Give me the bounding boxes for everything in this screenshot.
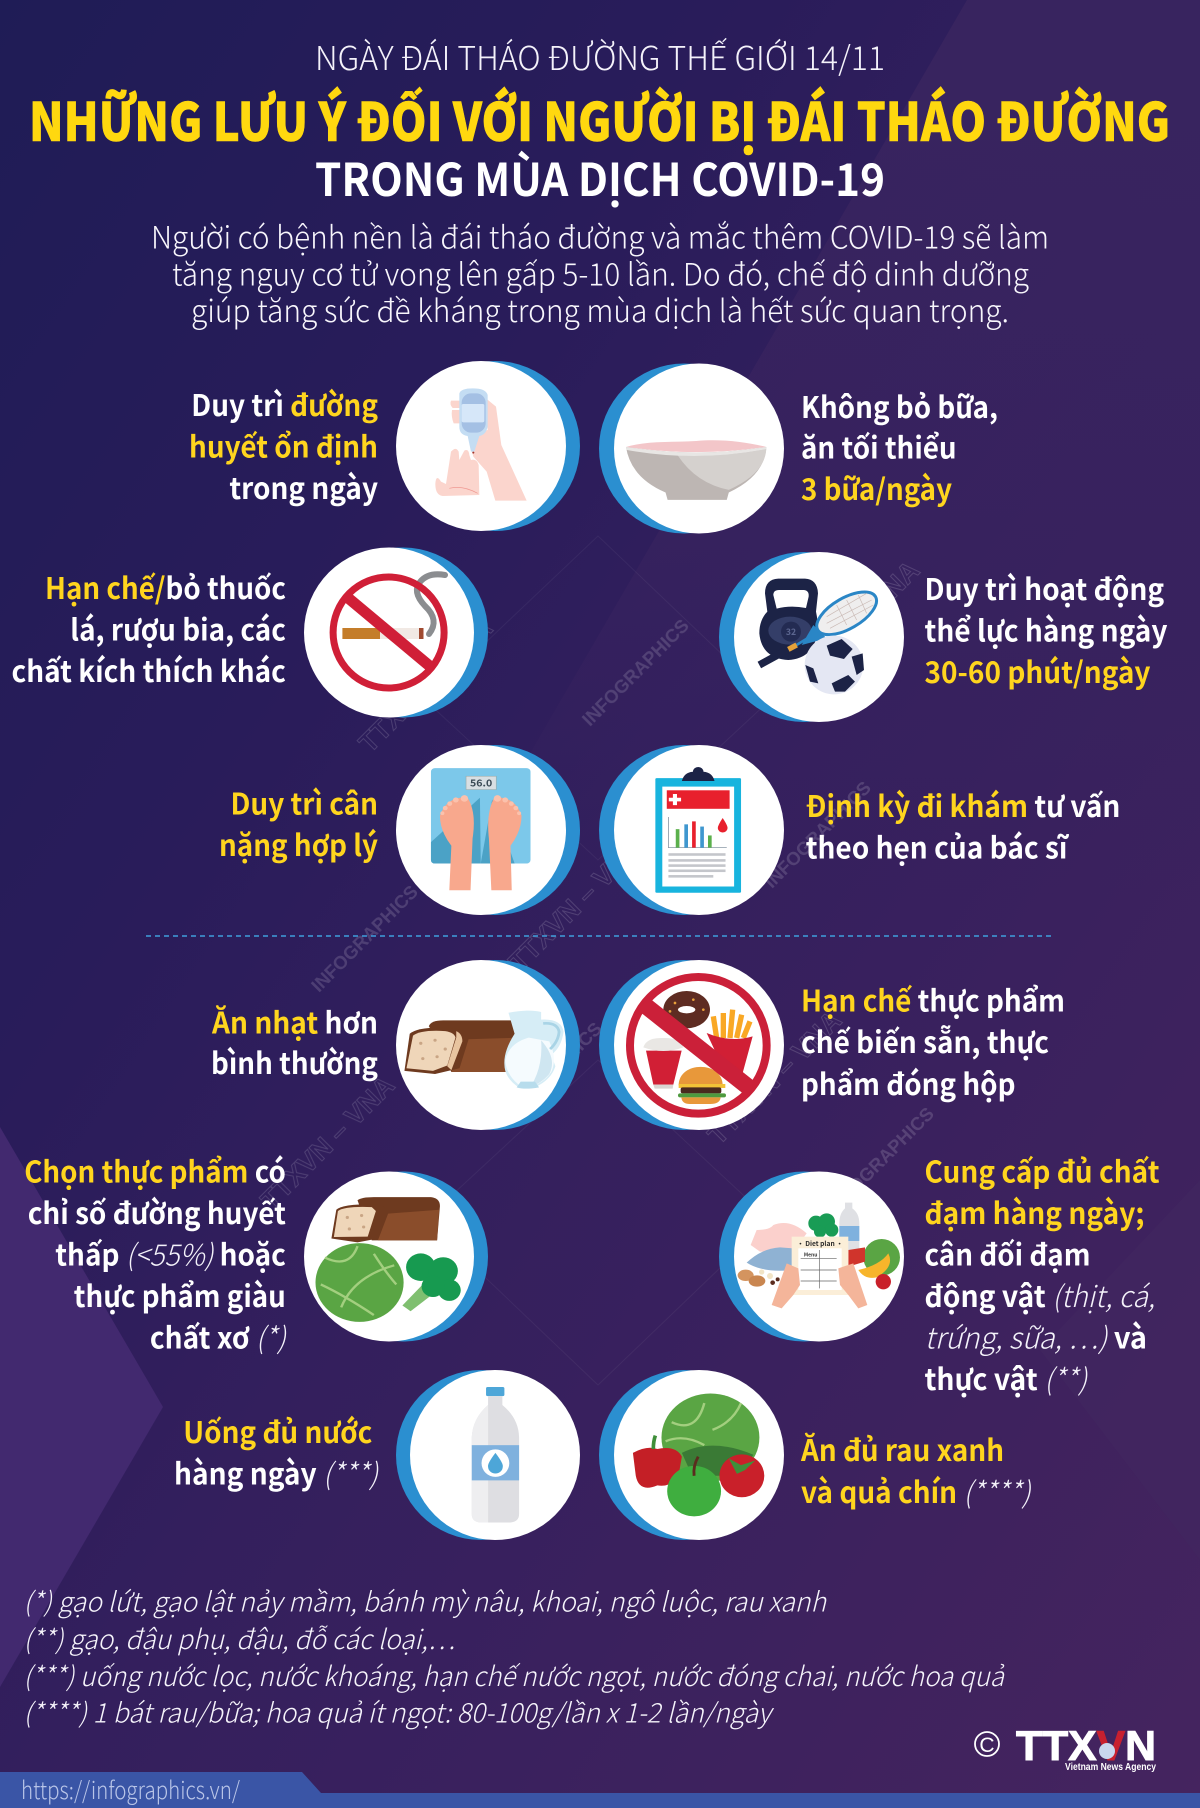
panel: keep blood sugar stable [189, 361, 580, 531]
footnotes: (***) uống nước lọc, nước khoáng, hạn chế nước ngọt, nước đóng chai, nước hoa quả [24, 1655, 1005, 1694]
text: low glycemic index food [24, 1149, 288, 1357]
text: daily physical activity: thể lực hàng ngày [924, 609, 1168, 651]
icon: feet on scale: 56.0 [470, 775, 492, 789]
text: limit processed food [801, 979, 1065, 1104]
watermarks: TTXVN – VNA [702, 1005, 847, 1150]
icon: no smoking [304, 548, 488, 718]
text: daily physical activity [924, 567, 1168, 692]
text: low glycemic index food: thực phẩm giàu [74, 1274, 286, 1316]
text: maintain healthy weight: Duy trì cân [230, 782, 378, 824]
watermarks: TTXVN – VNA [503, 832, 648, 977]
text: limit processed food: phẩm đóng hộp [801, 1062, 1016, 1104]
text: vegetables and fruit: và quả chín (****) [801, 1470, 1032, 1512]
text: enough protein: đạm hàng ngày; [924, 1191, 1144, 1233]
text: limit tobacco and alcohol: Hạn chế/bỏ thuốc [45, 566, 286, 608]
icon: kettlebell, racket and ball [719, 552, 904, 722]
text: enough protein: trứng, sữa, …) và [924, 1315, 1147, 1357]
panel: vegetables and fruit [599, 1370, 1032, 1540]
text: low glycemic index food: thấp (<55%) hoặc [55, 1232, 286, 1274]
panel: low glycemic index food [24, 1149, 488, 1357]
footnotes: (****) 1 bát rau/bữa; hoa quả ít ngọt: 80-100g/lần x 1-2 lần/ngày [24, 1692, 775, 1731]
icon: medical clipboard [599, 745, 784, 915]
text: enough protein: cân đối đạm [924, 1232, 1090, 1274]
text: limit processed food: chế biến sẵn, thực [801, 1020, 1049, 1062]
intro text [151, 212, 1049, 331]
divider [146, 935, 1053, 937]
watermarks: INFOGRAPHICS [578, 615, 693, 730]
text: eat less salt: Ăn nhạt hơn [211, 1001, 378, 1043]
text: drink enough water: hàng ngày (***) [174, 1451, 380, 1493]
icon: bread and milk jug [396, 960, 580, 1130]
text: do not skip meals: Không bỏ bữa, [801, 385, 998, 427]
watermarks [255, 555, 938, 1218]
panel: enough protein [719, 1149, 1160, 1399]
icon: bowl [599, 364, 784, 534]
panel: daily physical activity [719, 552, 1168, 722]
watermarks: TTXVN – VNA [353, 613, 498, 758]
text: maintain healthy weight: nặng hợp lý [219, 823, 378, 865]
text: regular checkups [806, 784, 1120, 867]
icon: diet plan with foods [719, 1172, 904, 1342]
text: limit tobacco and alcohol: chất kích thích khác [12, 649, 286, 691]
text: enough protein: thực vật (**) [924, 1357, 1089, 1399]
panel: regular checkups [599, 745, 1120, 915]
icon: kettlebell, racket and ball: 32 [786, 626, 796, 638]
watermarks: TTXVN – VNA [780, 555, 925, 700]
website url: https://infographics.vn/ [21, 1771, 240, 1806]
text: vegetables and fruit: Ăn đủ rau xanh [800, 1428, 1004, 1470]
logo: TTXVN: TTXVN [1016, 1722, 1156, 1769]
text: eat less salt: bình thường [211, 1041, 378, 1083]
subtitle: TRONG MÙA DỊCH COVID-19 [315, 144, 885, 209]
text: do not skip meals [801, 385, 998, 509]
text: drink enough water: Uống đủ nước [183, 1410, 372, 1452]
text: daily physical activity: 30-60 phút/ngày [924, 650, 1151, 692]
watermarks: INFOGRAPHICS [823, 1103, 938, 1218]
logo: TTXVN: C [979, 1734, 995, 1757]
logo: TTXVN: Vietnam News Agency [1065, 1761, 1156, 1773]
footer band [0, 1772, 1200, 1808]
text: limit processed food: Hạn chế thực phẩm [801, 979, 1065, 1021]
text: maintain healthy weight [219, 782, 378, 865]
watermarks: TTXVN – VNA [255, 1070, 400, 1215]
text: do not skip meals: 3 bữa/ngày [801, 467, 952, 509]
text: drink enough water [174, 1410, 380, 1493]
text: limit tobacco and alcohol [12, 566, 286, 691]
text: enough protein: động vật (thịt, cá, [924, 1274, 1155, 1316]
footnotes [24, 1581, 1005, 1731]
intro text: giúp tăng sức đề kháng trong mùa dịch là hết sức quan trọng. [191, 286, 1009, 331]
intro text: tăng nguy cơ tử vong lên gấp 5-10 lần. Do đó, chế độ dinh dưỡng [172, 250, 1029, 294]
footnotes: (**) gạo, đậu phụ, đậu, đỗ các loại,… [24, 1618, 455, 1657]
watermarks: INFOGRAPHICS [307, 881, 422, 996]
icon: no fast food [599, 960, 784, 1130]
text: keep blood sugar stable: Duy trì đường [191, 383, 378, 425]
text: daily physical activity: Duy trì hoạt động [924, 567, 1165, 609]
text: keep blood sugar stable [189, 383, 378, 508]
icon: vegetables and fruit [599, 1370, 784, 1540]
text: enough protein: Cung cấp đủ chất [924, 1149, 1160, 1191]
event line: NGÀY ĐÁI THÁO ĐƯỜNG THẾ GIỚI 14/11 [315, 32, 885, 80]
panel: maintain healthy weight [219, 745, 580, 915]
header [29, 32, 1170, 331]
text: low glycemic index food: chất xơ (*) [150, 1315, 288, 1357]
watermarks: INFOGRAPHICS [491, 1018, 606, 1133]
text: regular checkups: theo hẹn của bác sĩ [806, 825, 1069, 867]
text: enough protein [924, 1149, 1160, 1399]
text: do not skip meals: ăn tối thiểu [801, 425, 957, 467]
icon: bread, cabbage and broccoli [304, 1172, 488, 1342]
text: low glycemic index food: chỉ số đường huyết [28, 1191, 286, 1233]
panel: limit tobacco and alcohol [12, 548, 488, 718]
text: keep blood sugar stable: huyết ổn định [189, 424, 378, 466]
icon: feet on scale [396, 745, 580, 915]
text: keep blood sugar stable: trong ngày [229, 466, 378, 508]
text: regular checkups: Định kỳ đi khám tư vấn [806, 784, 1120, 826]
text: eat less salt [211, 1001, 378, 1083]
panel: do not skip meals [599, 364, 998, 534]
text: low glycemic index food: Chọn thực phẩm có [24, 1149, 286, 1191]
icon: glucose meter on hand [396, 361, 580, 531]
icon: diet plan with foods: Menu [804, 1252, 817, 1259]
text: vegetables and fruit [800, 1428, 1032, 1512]
footnotes: (*) gạo lứt, gạo lật nảy mầm, bánh mỳ nâu, khoai, ngô luộc, rau xanh [24, 1581, 827, 1620]
panel: drink enough water [174, 1370, 580, 1540]
watermarks: INFOGRAPHICS [760, 777, 875, 892]
text: limit tobacco and alcohol: lá, rượu bia, các [70, 608, 286, 650]
panel: eat less salt [211, 960, 580, 1130]
icon: diet plan with foods: • Diet plan • [797, 1238, 843, 1248]
panel: limit processed food [599, 960, 1065, 1130]
icon: water bottle [396, 1370, 580, 1540]
intro text: Người có bệnh nền là đái tháo đường và mắc thêm COVID-19 sẽ làm [151, 212, 1049, 258]
